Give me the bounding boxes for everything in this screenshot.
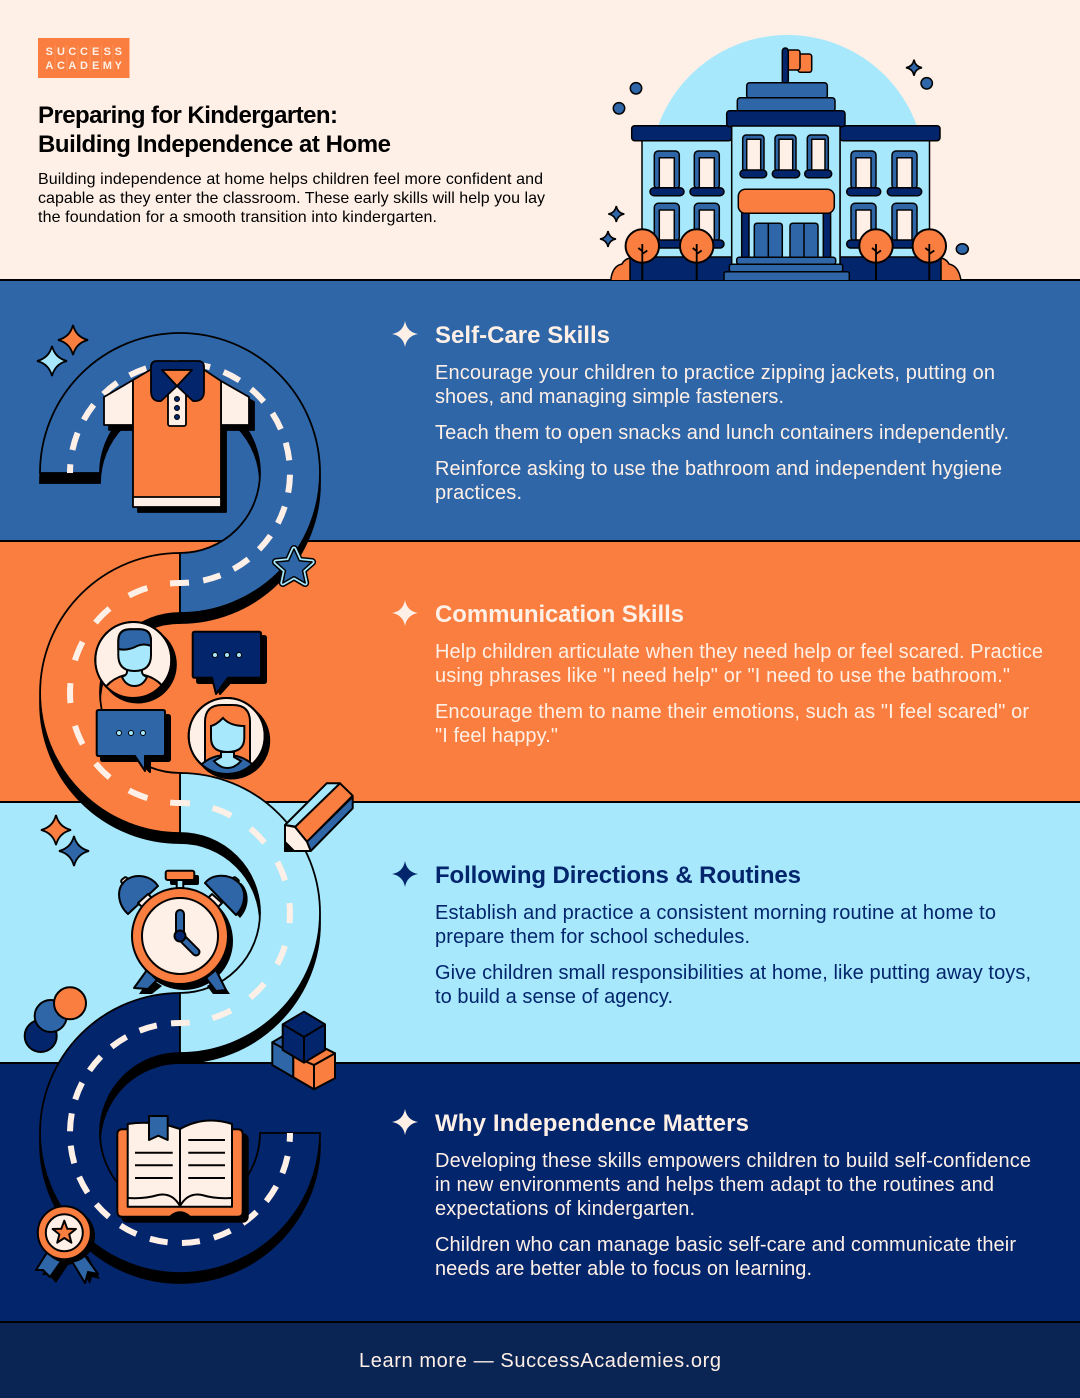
intro paragraph (38, 171, 545, 226)
section: why independence matters (392, 1109, 1031, 1280)
icon: three circles (25, 987, 86, 1052)
road segment: blue (40, 333, 320, 613)
body text: Encourage them to name their emotions, such as "I feel scared" or (435, 701, 1029, 723)
body text (435, 1150, 1031, 1280)
icon: section sparkle (392, 321, 418, 347)
icon: alarm clock (119, 871, 248, 994)
bookmark (149, 1116, 168, 1140)
hem (133, 497, 221, 507)
logo: E (92, 46, 99, 58)
avatar disc (95, 622, 171, 698)
icon: open book (117, 1116, 248, 1222)
avatar ring (189, 698, 265, 774)
illustration: school building (610, 35, 962, 280)
book shadow (122, 1134, 248, 1222)
body text: Give children small responsibilities at home, like putting away toys, (435, 962, 1031, 984)
decorative dots and sparkles around the school (600, 60, 968, 254)
icon: building blocks (272, 1012, 335, 1089)
title (38, 102, 391, 158)
icon: sparkles routines (41, 815, 89, 866)
shirt body (133, 367, 221, 507)
logo: U (57, 46, 65, 58)
side walls (642, 138, 930, 258)
panel: communication band (0, 541, 1080, 802)
body text: Children who can manage basic self-care and communicate their (435, 1234, 1016, 1256)
sleeves (104, 380, 249, 425)
tower stack (727, 83, 845, 127)
side windows (650, 151, 922, 248)
heading: Self-Care Skills (435, 322, 610, 349)
body text: to build a sense of agency. (435, 986, 673, 1008)
avatar disc (189, 698, 265, 774)
body text: shoes, and managing simple fasteners. (435, 386, 784, 408)
icon: section sparkle (392, 1109, 418, 1135)
medal star (53, 1221, 76, 1243)
steps (724, 257, 849, 282)
logo: C (80, 46, 88, 58)
book pages (128, 1120, 232, 1207)
icon: avatar girl (188, 697, 270, 780)
book cover (117, 1129, 243, 1217)
intro paragraph: the foundation for a smooth transition into kindergarten. (38, 209, 437, 226)
avatar ring (95, 622, 171, 698)
title: Preparing for Kindergarten: (38, 102, 338, 129)
body text: "I feel happy." (435, 725, 558, 747)
logo: A (45, 60, 53, 72)
icon: award ribbon (36, 1206, 100, 1284)
roof (632, 126, 940, 141)
text lines (135, 1140, 225, 1178)
panel: self-care band (0, 280, 1080, 541)
avatar shadow (193, 702, 269, 778)
body text: Encourage your children to practice zipping jackets, putting on (435, 362, 995, 384)
clock shadow (135, 875, 248, 994)
collar (151, 361, 204, 401)
heading: Communication Skills (435, 601, 684, 628)
body text: expectations of kindergarten. (435, 1198, 695, 1220)
orange block left (293, 1056, 314, 1089)
body text (435, 902, 1031, 1008)
bubble shadow (197, 636, 266, 694)
canopy (738, 189, 834, 213)
road dashes (70, 363, 290, 1243)
logo: E (92, 60, 99, 72)
panel: footer band (0, 1322, 1080, 1398)
road segment: light blue (180, 773, 320, 1053)
icon: star (276, 549, 312, 583)
icon: section sparkle (392, 600, 418, 626)
panel: why independence band (0, 1063, 1080, 1322)
section: self-care skills (392, 321, 1009, 504)
placket (168, 386, 186, 426)
logo: C (68, 46, 76, 58)
sky circle (658, 35, 916, 125)
logo (38, 38, 130, 78)
avatar shadow (100, 626, 176, 702)
bubble body (97, 710, 165, 771)
bubble body (193, 632, 261, 694)
center block (732, 126, 840, 266)
icon: sparkles self-care (37, 325, 88, 376)
body text: Developing these skills empowers children to build self-confidence (435, 1150, 1031, 1172)
panel: routines band (0, 802, 1080, 1063)
heading: Following Directions & Routines (435, 862, 801, 889)
building base (630, 257, 941, 281)
ribbon shadow (42, 1256, 100, 1284)
logo: D (80, 60, 88, 72)
logo: S (115, 46, 122, 58)
bushes (611, 258, 961, 281)
panel: header background (0, 0, 1080, 280)
body text: Establish and practice a consistent morning routine at home to (435, 902, 996, 924)
blue block (272, 1042, 293, 1077)
body text: in new environments and helps them adapt to the routines and (435, 1174, 994, 1196)
logo: Y (115, 60, 123, 72)
navy block (283, 1012, 325, 1063)
orange block top (293, 1048, 335, 1065)
title: Building Independence at Home (38, 131, 391, 158)
logo: S (46, 46, 53, 58)
icon: section sparkle (392, 861, 418, 887)
clock bells (119, 876, 244, 915)
body text: Reinforce asking to use the bathroom and independent hygiene (435, 458, 1002, 480)
clock face (132, 888, 228, 984)
section: following directions and routines (392, 861, 1031, 1008)
ribbon tails (36, 1253, 62, 1277)
body text: Teach them to open snacks and lunch containers independently. (435, 422, 1009, 444)
orange block right (314, 1053, 335, 1089)
clock top button (166, 871, 194, 889)
icon: polo shirt (104, 361, 254, 512)
body text: using phrases like "I need help" or "I need to use the bathroom." (435, 665, 1010, 687)
intro paragraph: capable as they enter the classroom. These early skills will help you lay (38, 190, 545, 207)
section: communication skills (392, 600, 1043, 747)
body text: Help children articulate when they need help or feel scared. Practice (435, 641, 1043, 663)
icon: navy speech bubble (193, 632, 266, 694)
body text (435, 641, 1043, 747)
page folds (128, 1194, 232, 1206)
logo: S (104, 46, 111, 58)
medal (41, 1209, 95, 1263)
body text: needs are better able to focus on learning. (435, 1258, 812, 1280)
heading: Why Independence Matters (435, 1110, 749, 1137)
collar opening (162, 370, 192, 386)
logo: M (103, 60, 112, 72)
icon: blue speech bubble (97, 710, 170, 772)
bubble shadow (101, 715, 170, 772)
winding road (40, 333, 320, 1283)
intro paragraph: Building independence at home helps children feel more confident and (38, 171, 543, 188)
entrance columns and doors (742, 212, 831, 258)
road shadow (40, 343, 320, 1283)
clock hands (174, 910, 196, 952)
flag (782, 48, 812, 84)
icon: avatar boy (94, 621, 177, 704)
logo: C (57, 60, 65, 72)
icon: pencil (285, 783, 353, 851)
shirt shadow (109, 385, 254, 512)
body text (435, 362, 1009, 504)
body text: practices. (435, 482, 522, 504)
logo: A (68, 60, 76, 72)
blue block top (272, 1036, 304, 1054)
clock feet (134, 970, 226, 991)
avatar figure (202, 704, 252, 773)
road segment: orange (40, 553, 180, 833)
center windows (740, 135, 832, 178)
road segment: navy (40, 993, 320, 1273)
footer text: Learn more — SuccessAcademies.org (359, 1350, 721, 1372)
body text: prepare them for school schedules. (435, 926, 750, 948)
trees (626, 229, 946, 281)
avatar figure (106, 628, 162, 697)
